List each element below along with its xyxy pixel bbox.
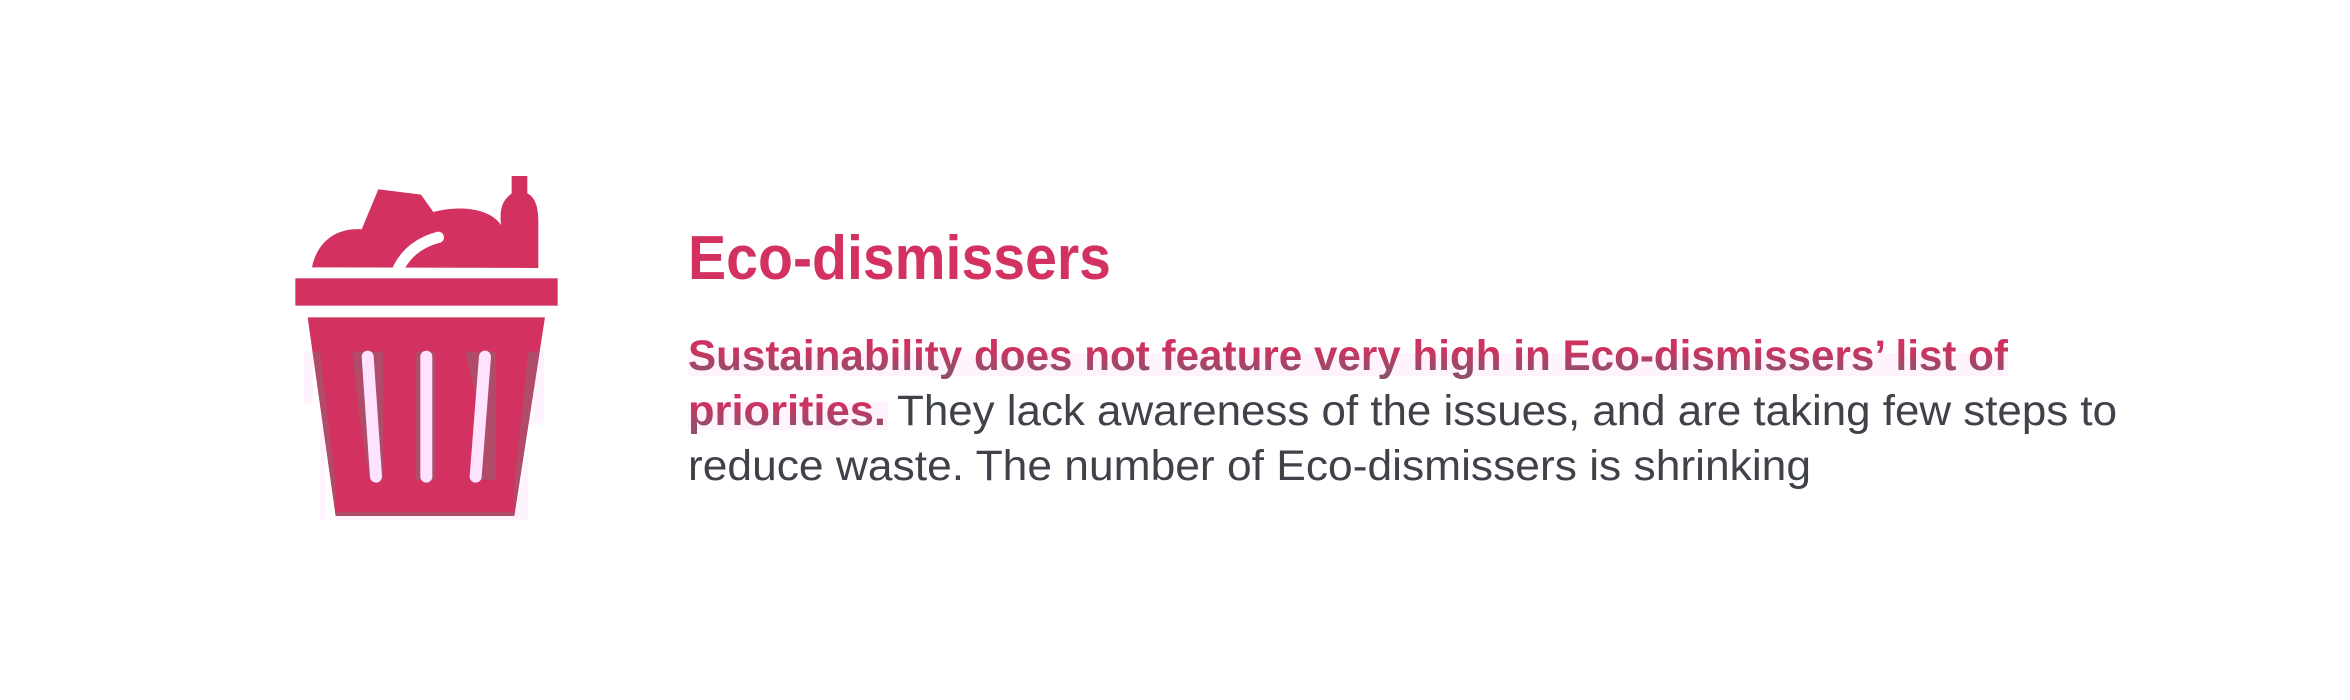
bin edge shading (313, 352, 540, 516)
icon: rubbish bin (295, 176, 558, 520)
body text (688, 332, 2117, 490)
rubbish highlight (398, 237, 438, 269)
bin slots (368, 357, 485, 477)
text highlight halo (688, 353, 2008, 430)
body line 3: reduce waste. The number of Eco-dismissers is shrinking (688, 442, 1811, 490)
rubbish pile (312, 176, 538, 268)
bin lid (295, 278, 558, 306)
heading: Eco-dismissers (688, 224, 1111, 293)
bold intro line 1: Sustainability does not feature very high in Eco-dismissers’ list of (688, 332, 2009, 380)
icon halo (304, 352, 544, 520)
body line 2: They lack awareness of the issues, and are taking few steps to (897, 387, 2117, 435)
bold intro line 2: priorities. (688, 387, 886, 435)
bin body (308, 317, 545, 516)
